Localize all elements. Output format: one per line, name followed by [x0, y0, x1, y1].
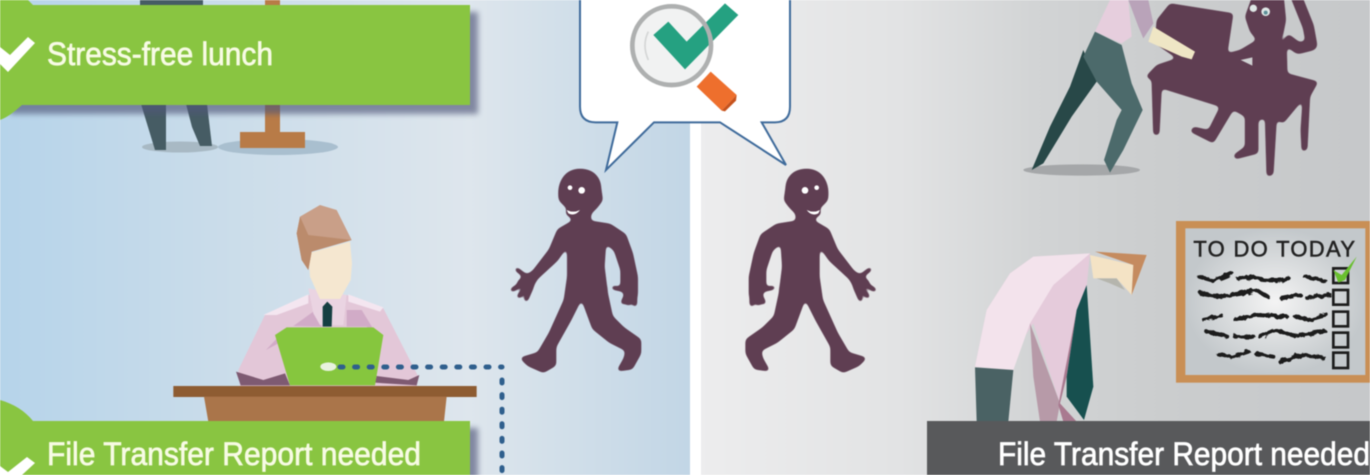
speech bubble [580, 0, 790, 170]
panel: left blue background [0, 0, 690, 475]
checkboxes [1333, 268, 1348, 368]
banner: Stress-free lunch [0, 0, 470, 120]
illustration: standing person legs and easel [140, 0, 338, 155]
face [1090, 255, 1133, 295]
bubble outline [580, 0, 790, 170]
icon: check mark [0, 457, 35, 475]
banner text: File Transfer Report needed [47, 436, 421, 472]
shirt [238, 295, 418, 387]
glass background [632, 6, 711, 85]
laptop light dot [320, 362, 336, 371]
board heading: TO DO TODAY [1193, 237, 1355, 262]
figure: left dark person [512, 170, 640, 372]
neck and face [308, 242, 352, 299]
icon: magnifying glass [632, 6, 737, 111]
tie [1067, 285, 1093, 420]
icon: check mark [0, 37, 35, 72]
banner shadow [10, 12, 478, 114]
shirt highlight [975, 253, 1090, 370]
desk body [204, 397, 447, 422]
hand [1148, 27, 1195, 59]
banner shape [0, 400, 470, 475]
easel shadow [218, 139, 338, 155]
eyes [802, 185, 819, 194]
banner: File Transfer Report needed (green) [0, 400, 470, 475]
forearms [236, 372, 419, 385]
scribbled list items [1199, 273, 1330, 362]
laptop [275, 327, 383, 385]
raised arm [1285, 0, 1312, 48]
banner text: Stress-free lunch [47, 36, 273, 72]
icon: teal check mark [653, 3, 738, 69]
silhouette [747, 170, 875, 372]
illustration: man working at laptop [173, 205, 477, 422]
person legs [140, 0, 212, 150]
lower shirt shade [1030, 323, 1060, 422]
ground shadow [1023, 164, 1140, 176]
panel: right grey background [701, 0, 1370, 475]
hair [297, 205, 352, 270]
shirt [1095, 0, 1132, 43]
ear shade [1097, 278, 1125, 290]
tie shadow [1058, 310, 1077, 422]
back leg [1032, 50, 1097, 170]
front leg [1083, 32, 1143, 173]
shirt shade [293, 312, 322, 327]
desk top [173, 386, 477, 397]
illustration: man bowing to to-do board [975, 221, 1370, 422]
shirt [975, 253, 1090, 403]
shirt highlights [263, 294, 308, 315]
mouth [567, 210, 580, 214]
gap under arm [1241, 57, 1252, 66]
tie [323, 302, 332, 327]
green tick [1333, 257, 1357, 283]
dark silhouette: desk and figure [1146, 0, 1318, 177]
person shadow [142, 142, 218, 152]
dotted connector line [340, 367, 502, 475]
figure: right dark person [747, 170, 875, 372]
hair [1095, 252, 1147, 295]
pants [975, 367, 1013, 422]
illustration: man pushing desk with dark figure [1023, 0, 1318, 177]
banner shape [0, 0, 470, 120]
eyes [568, 185, 585, 194]
easel stand [240, 0, 305, 148]
banner: File Transfer Report needed (grey) [927, 421, 1370, 475]
banner shape [927, 421, 1370, 475]
board frame [1176, 221, 1370, 383]
collar [308, 288, 347, 325]
sleeve [1128, 0, 1153, 38]
silhouette [512, 170, 640, 372]
hair shade [297, 217, 352, 270]
to-do board [1176, 221, 1370, 383]
eyes of dark figure [1250, 5, 1270, 16]
banner shadow [10, 428, 478, 475]
board surface [1185, 228, 1365, 375]
mouth [807, 210, 820, 214]
